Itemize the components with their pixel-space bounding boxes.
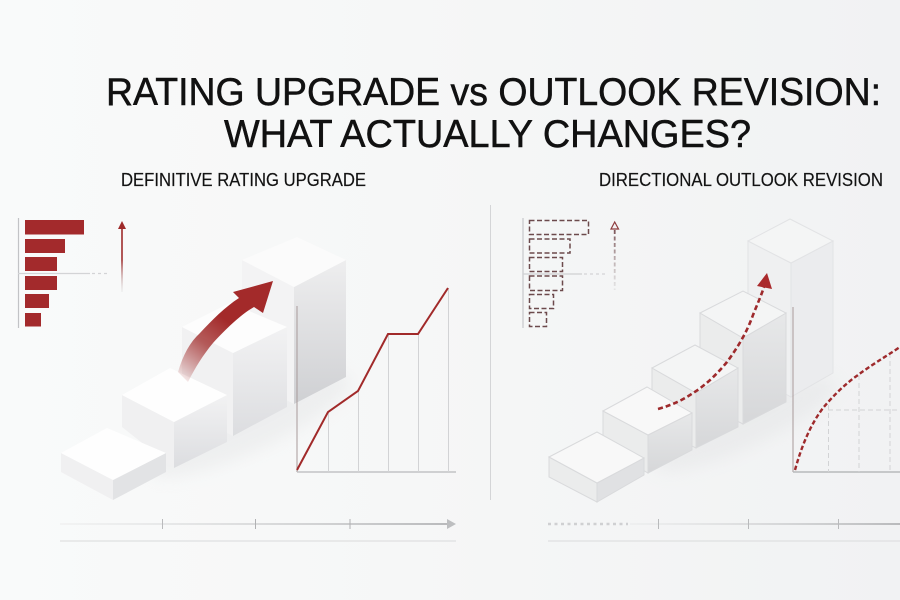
- panel: definitive rating upgrade: [18, 218, 456, 541]
- line chart: stepped upgrade line: [297, 288, 456, 472]
- block 1: [61, 428, 166, 500]
- title: RATING UPGRADE vs OUTLOOK REVISION:: [106, 71, 881, 114]
- arrow: solid red upgrade arrow: [178, 281, 273, 382]
- block 3: [182, 303, 287, 436]
- block 3: [652, 345, 738, 448]
- arrow: dashed red revision arrow: [658, 273, 772, 409]
- block 4: [700, 291, 786, 424]
- bar chart: solid rating bars: [18, 218, 110, 328]
- staircase of solid blocks: [61, 237, 361, 500]
- heading: directional outlook revision: DIRECTIONAL OUTLOOK REVISION: [599, 170, 883, 190]
- block 5: [748, 219, 833, 397]
- title: WHAT ACTUALLY CHANGES?: [224, 113, 751, 156]
- icon: small up arrow: [118, 221, 126, 292]
- title: [106, 71, 881, 156]
- panel divider: [490, 205, 492, 500]
- icon: dashed up arrow: [611, 222, 618, 290]
- panel: directional outlook revision: [523, 218, 900, 541]
- timeline: solid arrow: [60, 519, 456, 541]
- block 4: [242, 237, 346, 404]
- block 2: [122, 368, 227, 468]
- timeline: dotted start: [548, 519, 900, 541]
- heading: definitive rating upgrade: DEFINITIVE RATING UPGRADE: [121, 170, 366, 190]
- line chart: dashed curve: [793, 307, 900, 472]
- staircase of translucent blocks: [549, 219, 845, 502]
- block 2: [603, 387, 692, 473]
- block 1: [549, 432, 644, 502]
- bar chart: dashed outline bars: [523, 218, 605, 328]
